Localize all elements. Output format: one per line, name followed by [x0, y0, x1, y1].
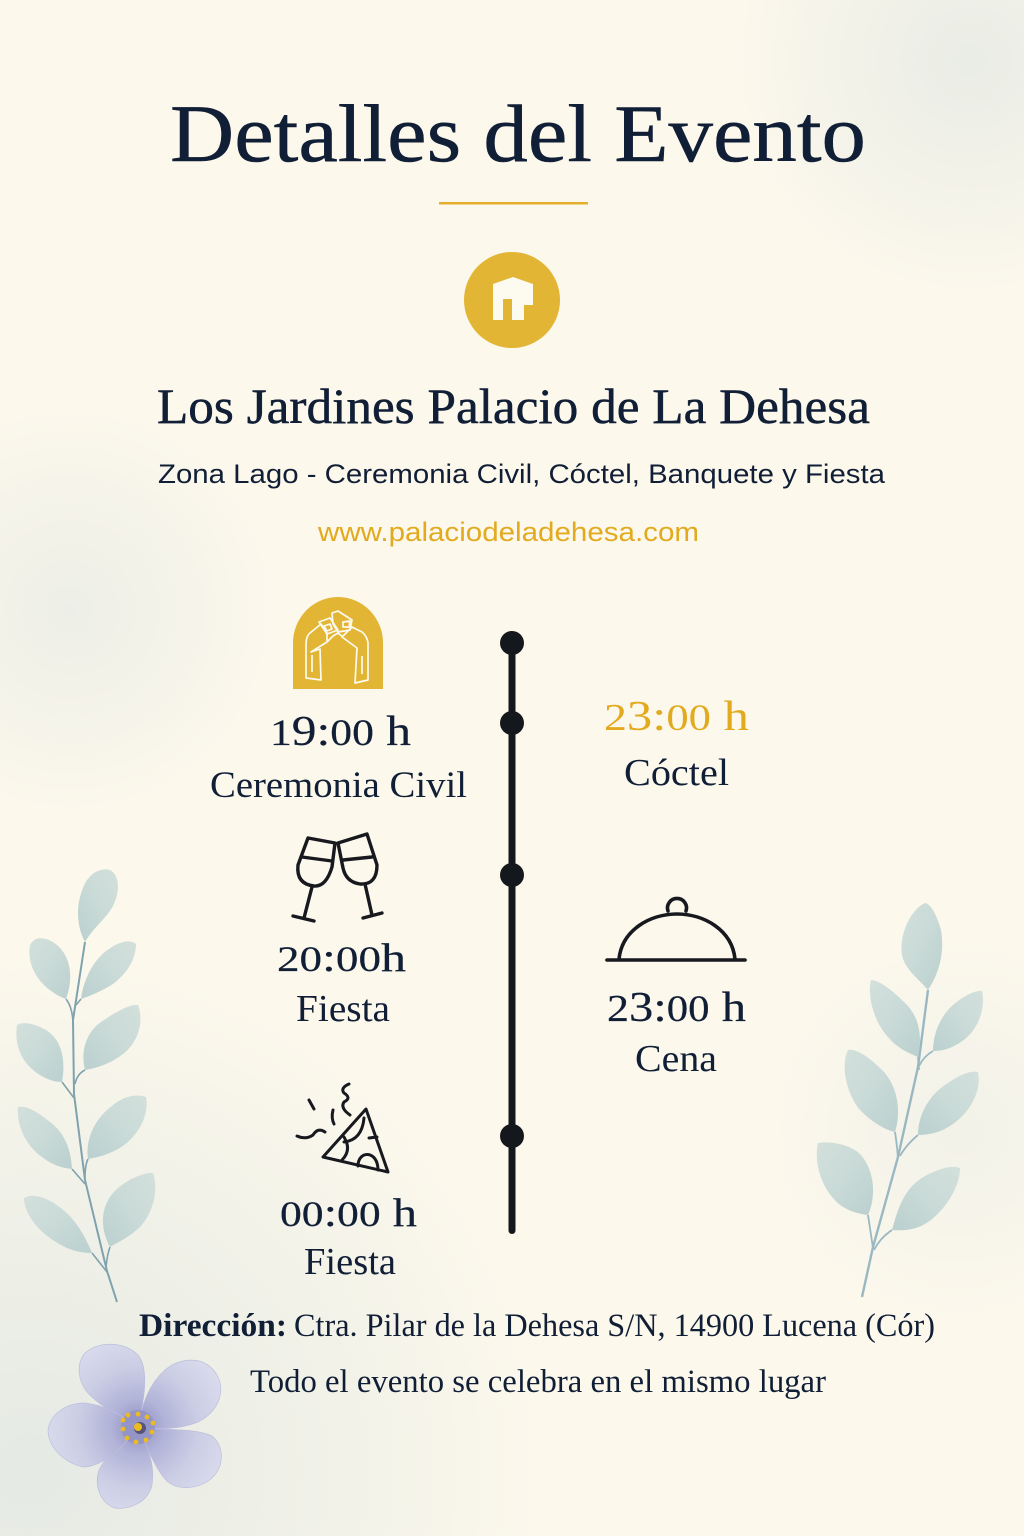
address line: Ctra. Pilar de la Dehesa S/N, 14900 Lucena (Cór)	[294, 1308, 935, 1344]
23:00 time: 23:00 h	[607, 985, 746, 1031]
violet flower	[48, 1344, 221, 1508]
23:00 gold time: 23:00 h	[604, 694, 749, 740]
Fiesta label: Fiesta	[304, 1241, 396, 1283]
icon: serving cloche	[607, 898, 745, 960]
Cóctel label: Cóctel	[624, 752, 729, 794]
icon: venue house	[464, 252, 560, 348]
19:00 time: 19:00 h	[270, 709, 411, 755]
title underline	[439, 202, 588, 204]
00:00 time: 00:00 h	[280, 1190, 417, 1235]
venue name: Los Jardines Palacio de La Dehesa	[157, 378, 870, 434]
Fiesta label: Fiesta	[296, 988, 390, 1030]
icon: ceremony arch	[293, 597, 383, 689]
address line: Dirección:	[139, 1308, 287, 1344]
right leaf branch	[817, 903, 983, 1297]
left leaf branch	[16, 869, 155, 1302]
venue details: Zona Lago - Ceremonia Civil, Cóctel, Banquete y Fiesta	[158, 459, 886, 489]
timeline	[500, 631, 524, 1234]
title: Detalles del Evento	[170, 88, 866, 179]
icon: toasting glasses	[293, 834, 382, 921]
icon: party hat	[297, 1084, 388, 1172]
Ceremonia Civil label: Ceremonia Civil	[210, 765, 467, 806]
Cena label: Cena	[635, 1038, 717, 1080]
website: www.palaciodeladehesa.com	[317, 517, 699, 547]
venue note: Todo el evento se celebra en el mismo lugar	[250, 1364, 826, 1400]
20:00 time: 20:00h	[277, 935, 406, 980]
